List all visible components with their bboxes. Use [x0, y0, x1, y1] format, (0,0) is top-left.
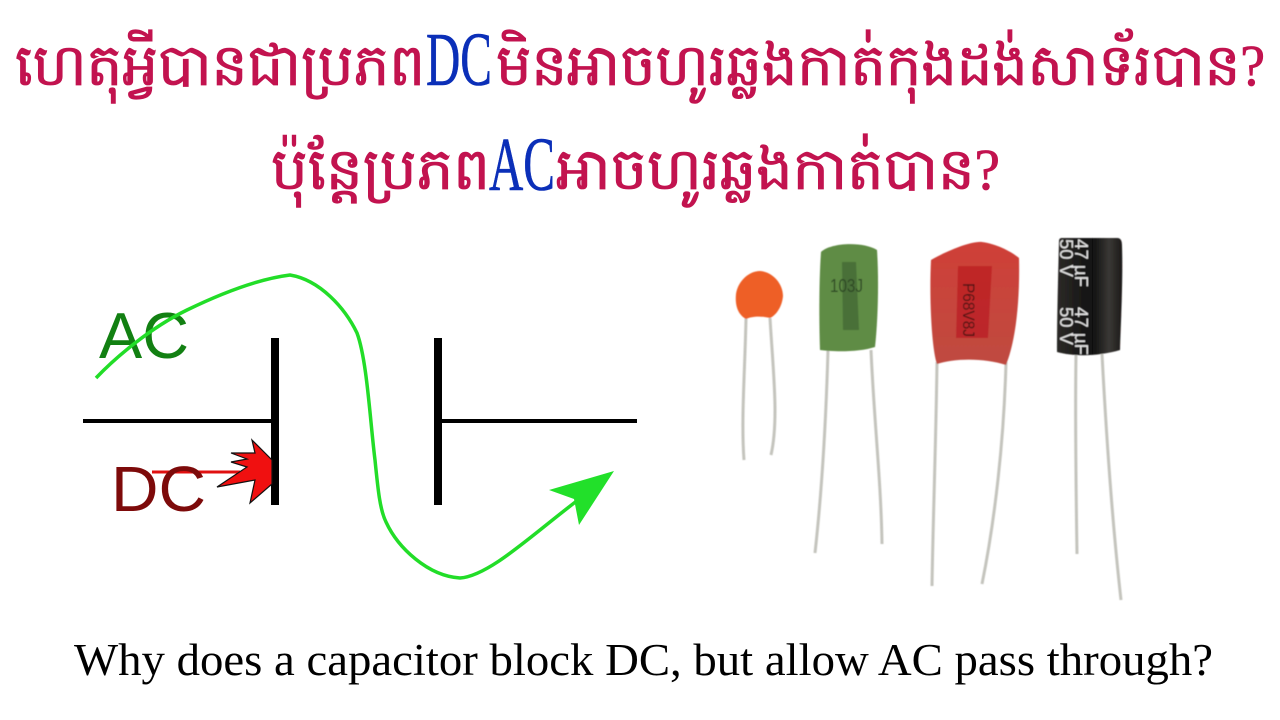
AC current curve	[96, 275, 582, 578]
title line 2: អាចហូរឆ្លងកាត់បាន?	[556, 133, 1000, 208]
capacitor photos	[736, 238, 1122, 600]
title line 1	[15, 18, 1265, 104]
capacitor rating text: 47 µF	[1071, 239, 1091, 287]
capacitor rating text repeat: 47 µF	[1071, 307, 1091, 355]
title line 2	[271, 123, 1000, 208]
capacitor voltage text repeat: 50 V	[1056, 307, 1076, 345]
left wire and plate	[83, 338, 279, 505]
title line 1: មិនអាចហូរឆ្លងកាត់កុងដង់សាទ័របាន?	[496, 28, 1265, 104]
red film capacitor	[930, 242, 1019, 586]
English caption: Why does a capacitor block DC, but allow AC pass through?	[74, 635, 1213, 685]
title line 2: AC	[489, 123, 555, 207]
red film capacitor: P68V8J	[959, 283, 978, 337]
title line 1: DC	[426, 18, 492, 102]
label: DC: DC	[111, 453, 206, 525]
black electrolytic capacitor	[1056, 238, 1122, 600]
title line 1: ហេតុអ្វីបានជាប្រភព	[15, 29, 425, 104]
DC blocked burst	[217, 440, 272, 503]
ceramic disc capacitor	[736, 271, 783, 460]
green film capacitor	[815, 244, 882, 553]
DC current line	[152, 470, 240, 474]
right plate and wire	[434, 338, 637, 505]
AC arrow head	[549, 471, 614, 525]
capacitor voltage text: 50 V	[1056, 239, 1076, 277]
label: AC: AC	[99, 299, 189, 372]
green film capacitor: 103J	[830, 276, 863, 296]
title line 2: ប៉ុន្តែប្រភព	[271, 135, 490, 208]
capacitor circuit diagram	[83, 275, 637, 578]
